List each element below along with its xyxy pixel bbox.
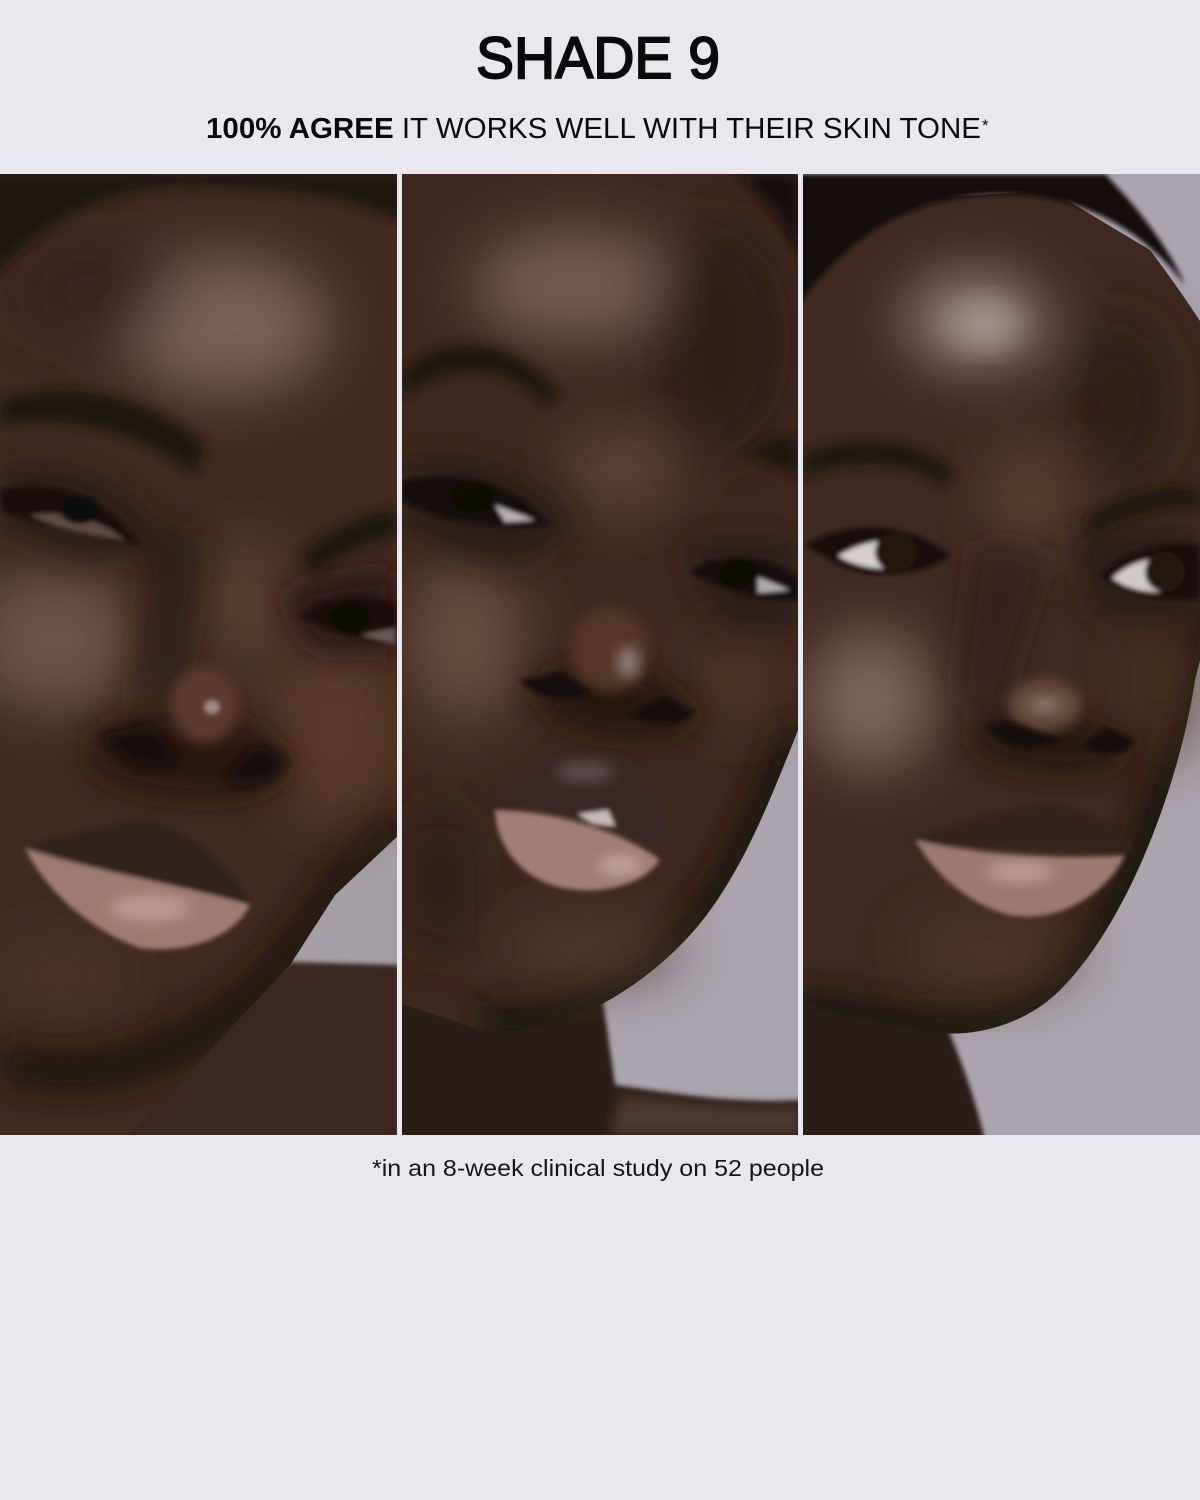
- glows two: [405, 220, 790, 975]
- lips two: [490, 751, 672, 890]
- shoulder one: [130, 958, 397, 1135]
- brows three: [803, 441, 1200, 731]
- footnote: *in an 8-week clinical study on 52 people: [372, 1155, 824, 1181]
- eye left three: [805, 527, 950, 574]
- neck highlight two: [610, 1095, 800, 1135]
- skin base three: [790, 190, 1200, 1034]
- backdrop one: [287, 836, 397, 969]
- socket shadows one: [0, 465, 397, 799]
- eye right two: [690, 558, 798, 600]
- backdrop three: [803, 174, 1200, 1135]
- hair one: [0, 174, 410, 280]
- eye left one: [0, 486, 140, 545]
- panel: face three: [790, 174, 1200, 1140]
- hair three: [795, 174, 1185, 310]
- eye left two: [402, 477, 550, 526]
- backdrop two: [601, 730, 798, 1104]
- lips one: [25, 821, 250, 949]
- neck three: [803, 1008, 988, 1135]
- eye right three: [1100, 543, 1200, 600]
- jaw shadow two: [480, 725, 800, 1022]
- nose three: [985, 698, 1135, 754]
- socket shadows three: [955, 530, 1200, 772]
- panel: face two: [390, 174, 810, 1140]
- panel: face one: [0, 174, 420, 1140]
- skin base two: [390, 174, 800, 1031]
- hair two: [736, 174, 798, 255]
- eye right one: [300, 597, 397, 645]
- nose highlight one: [204, 700, 220, 714]
- subtitle asterisk: *: [982, 116, 989, 135]
- neck and shoulder two: [402, 1002, 798, 1135]
- eye socket shadows two: [402, 456, 798, 739]
- forehead glow one: [0, 240, 400, 1010]
- jaw shadow three: [790, 600, 1200, 1026]
- brows two: [402, 345, 798, 692]
- skin base one: [0, 174, 420, 1135]
- brows and nose one: [0, 391, 397, 785]
- title: SHADE 9: [476, 26, 720, 91]
- subtitle: 100% AGREE IT WORKS WELL WITH THEIR SKIN TONE: [206, 113, 981, 145]
- forehead highlight three: [951, 303, 1019, 347]
- lips three: [905, 804, 1135, 917]
- nose two: [520, 647, 695, 724]
- jaw shadow one: [0, 815, 397, 1072]
- glows three: [805, 275, 1190, 985]
